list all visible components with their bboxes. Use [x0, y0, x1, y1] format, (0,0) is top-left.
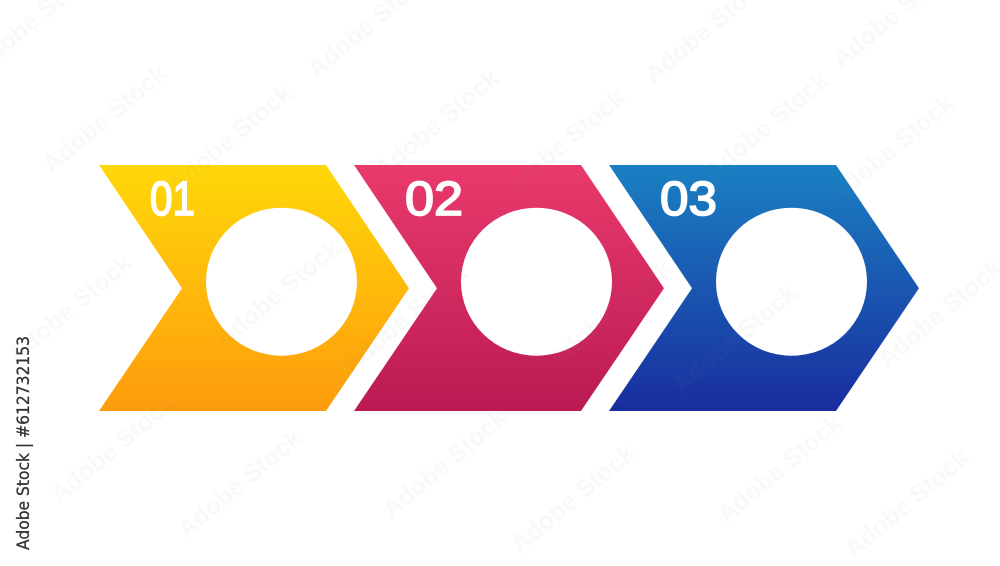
watermark pattern: Adobe Stock	[369, 64, 504, 184]
watermark pattern: Adobe Stock	[495, 84, 630, 204]
step 1: yellow arrow	[99, 165, 409, 411]
number 03: 03	[660, 173, 717, 226]
arrow shape 1	[99, 165, 409, 411]
watermark pattern: Adobe Stock	[667, 279, 802, 399]
watermark pattern: Adobe Stock	[162, 79, 297, 199]
watermark pattern: Adobe Stock	[824, 89, 959, 209]
watermark pattern: Adobe Stock	[542, 254, 677, 374]
circle placeholder 1	[206, 208, 357, 356]
number 01: 01	[150, 173, 195, 226]
arrow shape 2	[354, 165, 664, 411]
watermark pattern: Adobe Stock	[699, 66, 834, 186]
watermark pattern: Adobe Stock	[712, 409, 847, 529]
circle placeholder 2	[461, 208, 612, 356]
stock id side label: Adobe Stock | #612732153	[14, 336, 34, 550]
arrow shape 3	[609, 165, 919, 411]
number 02: 02	[405, 173, 463, 226]
watermark pattern: Adobe Stock	[377, 404, 512, 524]
watermark pattern: Adobe Stock	[505, 439, 640, 559]
watermark pattern: Adobe Stock	[45, 389, 180, 509]
circle placeholder 3	[716, 208, 867, 356]
watermark pattern: Adobe Stock	[337, 259, 472, 379]
watermark pattern: Adobe Stock	[172, 424, 307, 544]
watermark pattern: Adobe Stock	[839, 444, 974, 564]
watermark pattern: Adobe Stock	[2, 249, 137, 369]
watermark pattern: Adobe Stock	[37, 59, 172, 179]
watermark pattern: Adobe Stock	[210, 234, 345, 354]
step 2: crimson arrow	[354, 165, 664, 411]
step 3: blue arrow	[609, 165, 919, 411]
